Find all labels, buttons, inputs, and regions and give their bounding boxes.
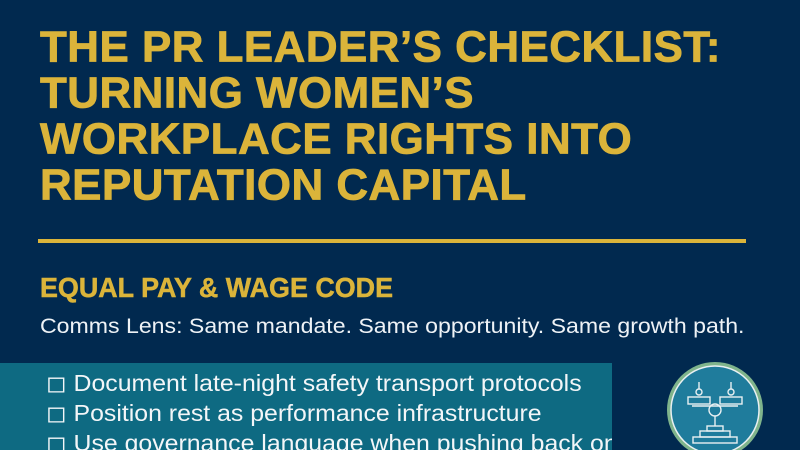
section heading: EQUAL PAY & WAGE CODE (40, 272, 393, 303)
title: WORKPLACE RIGHTS INTO (40, 115, 632, 164)
title (40, 23, 721, 210)
icon: scale badge (667, 362, 763, 450)
checklist item 2: ◻ Position rest as performance infrastructure (46, 400, 542, 426)
checklist item 1: ◻ Document late-night safety transport protocols (46, 370, 582, 396)
panel: checklist (0, 363, 612, 450)
title: THE PR LEADER’S CHECKLIST: (40, 23, 721, 72)
comms lens text: Comms Lens: Same mandate. Same opportunity. Same growth path. (40, 315, 744, 338)
title: REPUTATION CAPITAL (40, 161, 527, 210)
title: TURNING WOMEN’S (40, 69, 474, 118)
